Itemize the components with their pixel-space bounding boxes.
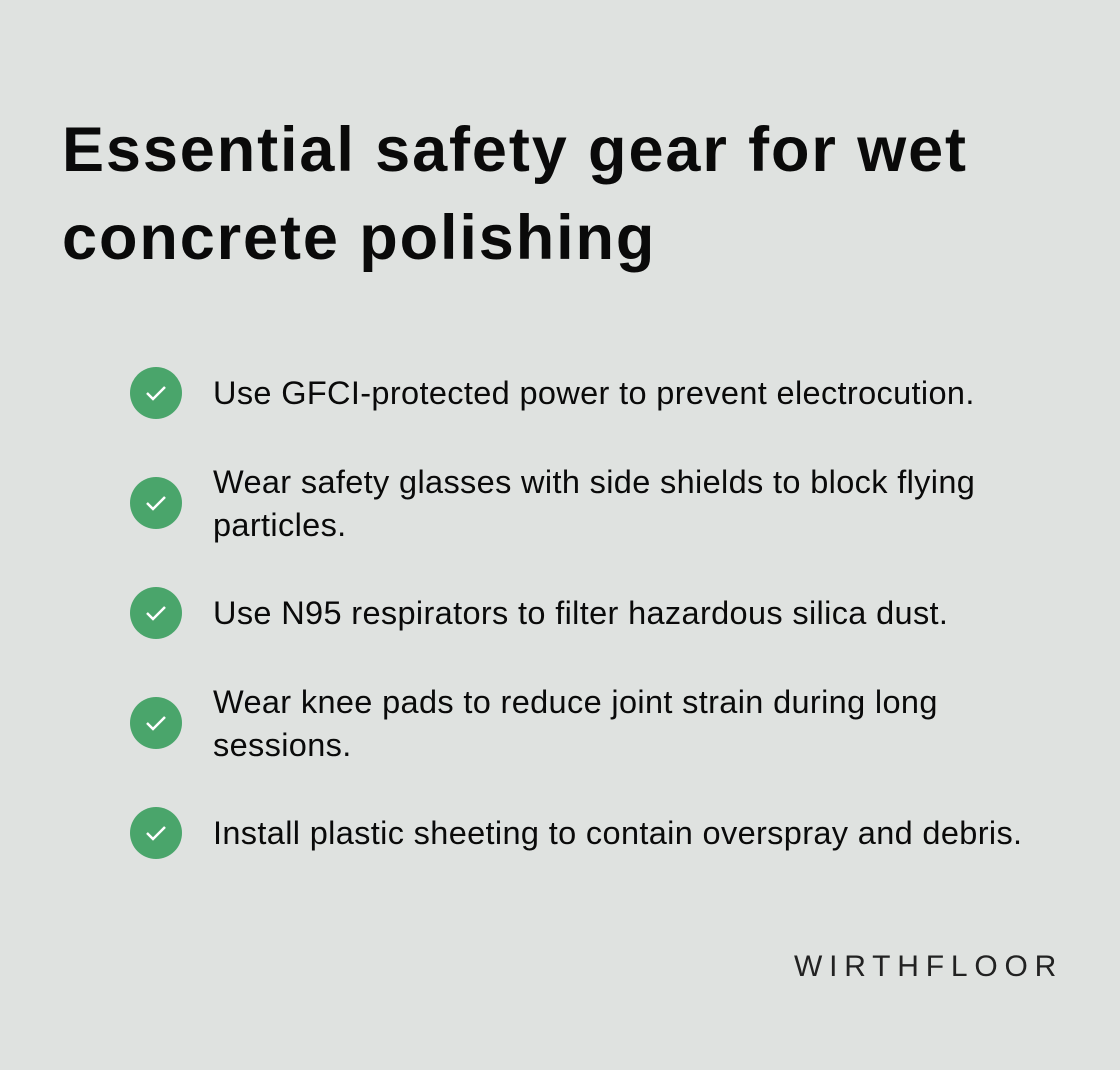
text — [213, 464, 975, 543]
item 2 — [130, 464, 975, 543]
icon: check — [130, 587, 182, 639]
text: sessions. — [213, 727, 352, 763]
icon: check — [130, 367, 182, 419]
item 1 — [130, 367, 975, 419]
item 4 — [130, 684, 938, 763]
text: particles. — [213, 507, 347, 543]
item 3 — [130, 587, 948, 639]
item 5 — [130, 807, 1022, 859]
logo: WIRTHFLOOR — [794, 950, 1063, 983]
text: Use N95 respirators to filter hazardous silica dust. — [213, 595, 948, 631]
title — [62, 115, 968, 273]
title: concrete polishing — [62, 203, 656, 273]
text — [213, 684, 938, 763]
title: Essential safety gear for wet — [62, 115, 968, 185]
text: Wear knee pads to reduce joint strain during long — [213, 684, 938, 720]
icon: check — [130, 697, 182, 749]
text: Install plastic sheeting to contain overspray and debris. — [213, 815, 1022, 851]
text: Wear safety glasses with side shields to block flying — [213, 464, 975, 500]
icon: check — [130, 477, 182, 529]
icon: check — [130, 807, 182, 859]
text: Use GFCI-protected power to prevent electrocution. — [213, 375, 975, 411]
